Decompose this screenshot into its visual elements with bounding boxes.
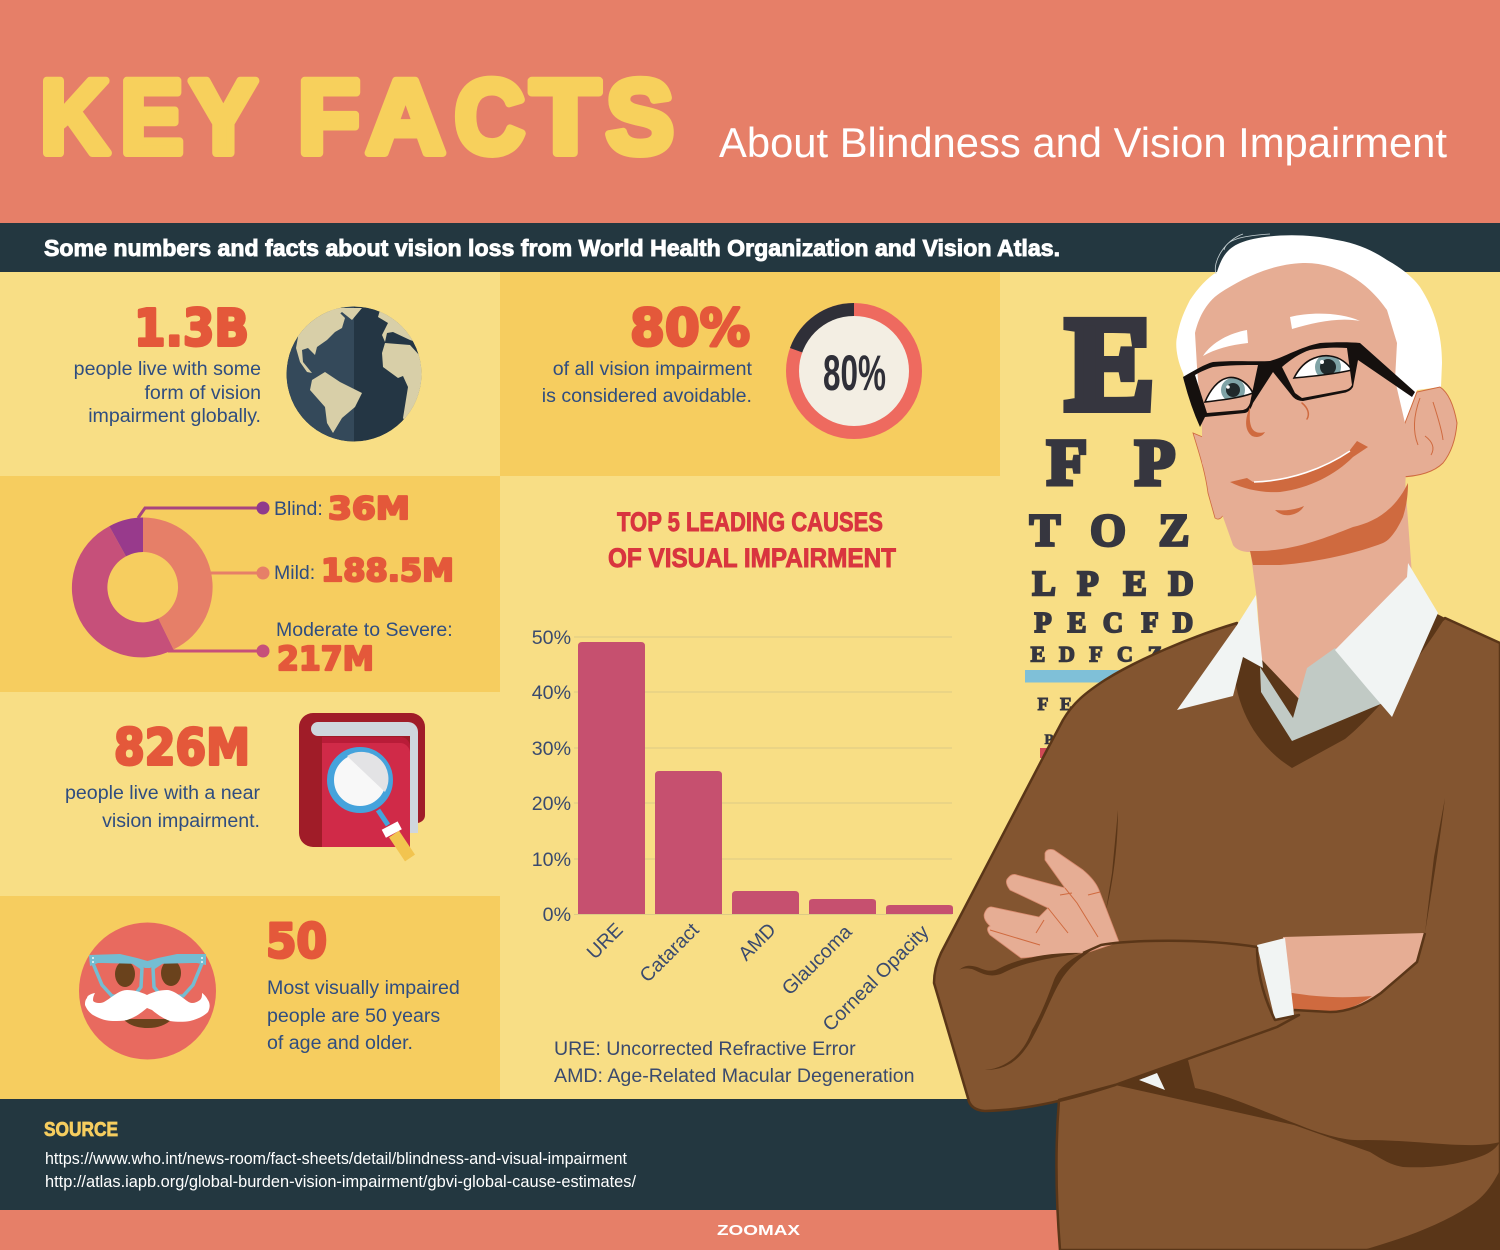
eye chart bbox=[1000, 272, 1500, 1099]
lower right shadow bbox=[1363, 1170, 1500, 1250]
under-arm shadow bbox=[1115, 1060, 1500, 1167]
eye chart letter rows: E bbox=[1066, 290, 1154, 438]
shirt cuff bbox=[1257, 938, 1294, 1020]
description: near vision: people live with a near bbox=[65, 782, 260, 804]
description: 80%: of all vision impairment bbox=[553, 358, 753, 380]
eye chart letter rows: O bbox=[1090, 504, 1126, 556]
y axis labels: 20% bbox=[532, 793, 571, 815]
left hand bbox=[984, 849, 1119, 958]
stat: 36M: 36M bbox=[328, 491, 410, 527]
stat: 188.5M: 188.5M bbox=[321, 553, 454, 589]
bars bbox=[578, 642, 953, 914]
bar chart bbox=[532, 627, 953, 1036]
source links: https://www.who.int/news-room/fact-sheets/detail/blindness-and-visual-impairment bbox=[45, 1150, 627, 1168]
chart title: TOP 5 LEADING CAUSES bbox=[617, 507, 883, 537]
source band bbox=[0, 1099, 1500, 1210]
intro strip bbox=[0, 223, 1500, 272]
neck bbox=[1250, 480, 1412, 725]
shirt tail bbox=[1139, 1073, 1165, 1090]
icon: face with glasses and moustache bbox=[79, 922, 216, 1060]
description: 1.3B: impairment globally. bbox=[88, 405, 261, 427]
illustration: older man with glasses bbox=[934, 234, 1500, 1250]
panel: 80% avoidable bbox=[500, 272, 1000, 476]
eye chart letter rows: Z bbox=[1148, 642, 1162, 666]
label: blind: Blind: bbox=[274, 498, 323, 520]
y axis labels bbox=[532, 627, 571, 926]
x axis labels: Corneal Opacity bbox=[819, 921, 934, 1036]
source heading: SOURCE bbox=[44, 1119, 118, 1141]
x axis labels: AMD bbox=[734, 919, 781, 965]
y axis labels: 0% bbox=[543, 904, 571, 926]
stat: 1.3B: 1.3B bbox=[134, 300, 249, 358]
title: S bbox=[606, 59, 674, 176]
stat: 80%: 80% bbox=[630, 300, 750, 358]
right ear bbox=[1400, 387, 1457, 477]
arm outlines bbox=[1083, 941, 1299, 1085]
description: age 50: Most visually impaired bbox=[267, 977, 460, 999]
y axis labels: 50% bbox=[532, 627, 571, 649]
eye chart letter rows: E bbox=[1068, 608, 1086, 639]
y axis labels: 40% bbox=[532, 682, 571, 704]
jaw shadow bbox=[1250, 483, 1408, 565]
left ear bbox=[1193, 433, 1225, 519]
icon: globe bbox=[286, 306, 422, 442]
abbreviations note: URE: Uncorrected Refractive Error bbox=[554, 1038, 856, 1060]
x axis labels: URE bbox=[583, 919, 628, 964]
stat: 50: 50 bbox=[266, 914, 327, 970]
title: E bbox=[120, 59, 183, 176]
label: moderate to severe: Moderate to Severe: bbox=[276, 619, 453, 641]
eyes bbox=[1205, 354, 1352, 402]
panel: severity breakdown bbox=[0, 476, 500, 692]
leader: moderate to severe bbox=[168, 644, 270, 658]
white hair bbox=[1176, 235, 1442, 423]
eye chart letter rows: F bbox=[1089, 642, 1103, 666]
eye chart letter rows: E bbox=[1031, 642, 1045, 666]
eye chart letter rows: P bbox=[1044, 732, 1054, 748]
eye chart letter rows: Z bbox=[1159, 504, 1189, 556]
leader: blind bbox=[138, 502, 270, 518]
eye chart letter rows: F bbox=[1038, 694, 1048, 714]
x axis labels: Glaucoma bbox=[778, 921, 857, 1000]
x axis labels: Cataract bbox=[636, 919, 704, 987]
chart: donut bbox=[72, 517, 213, 657]
chart: 80% ring bbox=[786, 303, 922, 439]
eye chart letter rows: F bbox=[1047, 426, 1087, 500]
source links: http://atlas.iapb.org/global-burden-vision-impairment/gbvi-global-cause-estimates/ bbox=[45, 1173, 636, 1191]
sleeve folds bbox=[959, 945, 1101, 1070]
eyebrows bbox=[1203, 314, 1360, 356]
mouth bbox=[1230, 441, 1368, 515]
face bbox=[1195, 263, 1408, 552]
x axis labels bbox=[583, 919, 934, 1036]
eye chart letter rows: E bbox=[1060, 694, 1072, 714]
stat: 217M: 217M bbox=[277, 639, 374, 678]
header band bbox=[0, 0, 1500, 223]
stray hairs bbox=[1215, 234, 1270, 274]
sweater fold lines bbox=[1106, 798, 1445, 933]
chart title: OF VISUAL IMPAIRMENT bbox=[608, 543, 896, 573]
nose bbox=[1246, 403, 1308, 437]
title: Y bbox=[190, 59, 257, 176]
eye chart letter rows: E bbox=[1123, 564, 1147, 603]
eye chart letter rows: D bbox=[1168, 564, 1194, 603]
description: 1.3B: form of vision bbox=[144, 382, 261, 404]
chart panel: top 5 causes bbox=[500, 476, 1000, 1099]
glasses bbox=[1183, 342, 1415, 427]
panel: age 50 bbox=[0, 896, 500, 1099]
title: K bbox=[40, 59, 109, 176]
title: A bbox=[366, 59, 445, 176]
title: C bbox=[455, 59, 525, 176]
description: near vision: vision impairment. bbox=[102, 810, 260, 832]
subtitle: About Blindness and Vision Impairment bbox=[719, 119, 1447, 166]
description: 80%: is considered avoidable. bbox=[542, 385, 752, 407]
eye chart letter rows: P bbox=[1135, 426, 1175, 500]
panel: 1.3B people bbox=[74, 306, 422, 442]
leader: mild bbox=[211, 566, 270, 580]
sweater v-neck shadow bbox=[1233, 600, 1445, 768]
eye chart letter rows: D bbox=[1173, 608, 1193, 639]
eye chart letter rows: F bbox=[1141, 608, 1159, 639]
shirt inner collar bbox=[1260, 648, 1383, 741]
intro text: Some numbers and facts about vision loss from World Health Organization and Vision Atlas. bbox=[44, 235, 1060, 261]
eye chart letter rows: P bbox=[1077, 564, 1099, 603]
shirt collar left bbox=[1177, 595, 1263, 710]
description: age 50: of age and older. bbox=[267, 1032, 413, 1054]
abbreviations note: AMD: Age-Related Macular Degeneration bbox=[554, 1065, 914, 1087]
label: mild: Mild: bbox=[274, 562, 315, 584]
logo: ZOOMAX bbox=[717, 1222, 800, 1239]
eye chart letter rows: C bbox=[1103, 608, 1123, 639]
y axis labels: 30% bbox=[532, 738, 571, 760]
title bbox=[40, 59, 674, 176]
footer band bbox=[0, 1210, 1500, 1250]
shirt collar right bbox=[1335, 563, 1438, 717]
title: T bbox=[531, 59, 600, 176]
eye chart letter rows: P bbox=[1034, 608, 1052, 639]
title: F bbox=[298, 59, 360, 176]
stat: 826M: 826M bbox=[114, 718, 250, 776]
panel: near vision bbox=[0, 692, 500, 896]
description: 1.3B: people live with some bbox=[74, 358, 261, 380]
sweater body bbox=[934, 618, 1500, 1250]
description: age 50: people are 50 years bbox=[267, 1005, 440, 1027]
blue line on chart bbox=[1025, 670, 1145, 682]
eye chart letter rows: L bbox=[1032, 564, 1056, 603]
y axis labels: 10% bbox=[532, 849, 571, 871]
eye chart letter rows: T bbox=[1030, 504, 1060, 556]
ring label: 80% bbox=[823, 345, 886, 401]
eye chart letter rows bbox=[1030, 290, 1194, 748]
eye chart letter rows: D bbox=[1059, 642, 1075, 666]
right forearm skin bbox=[1283, 933, 1425, 1012]
eye chart letter rows: C bbox=[1117, 642, 1133, 666]
icon: book and magnifier bbox=[299, 713, 425, 858]
